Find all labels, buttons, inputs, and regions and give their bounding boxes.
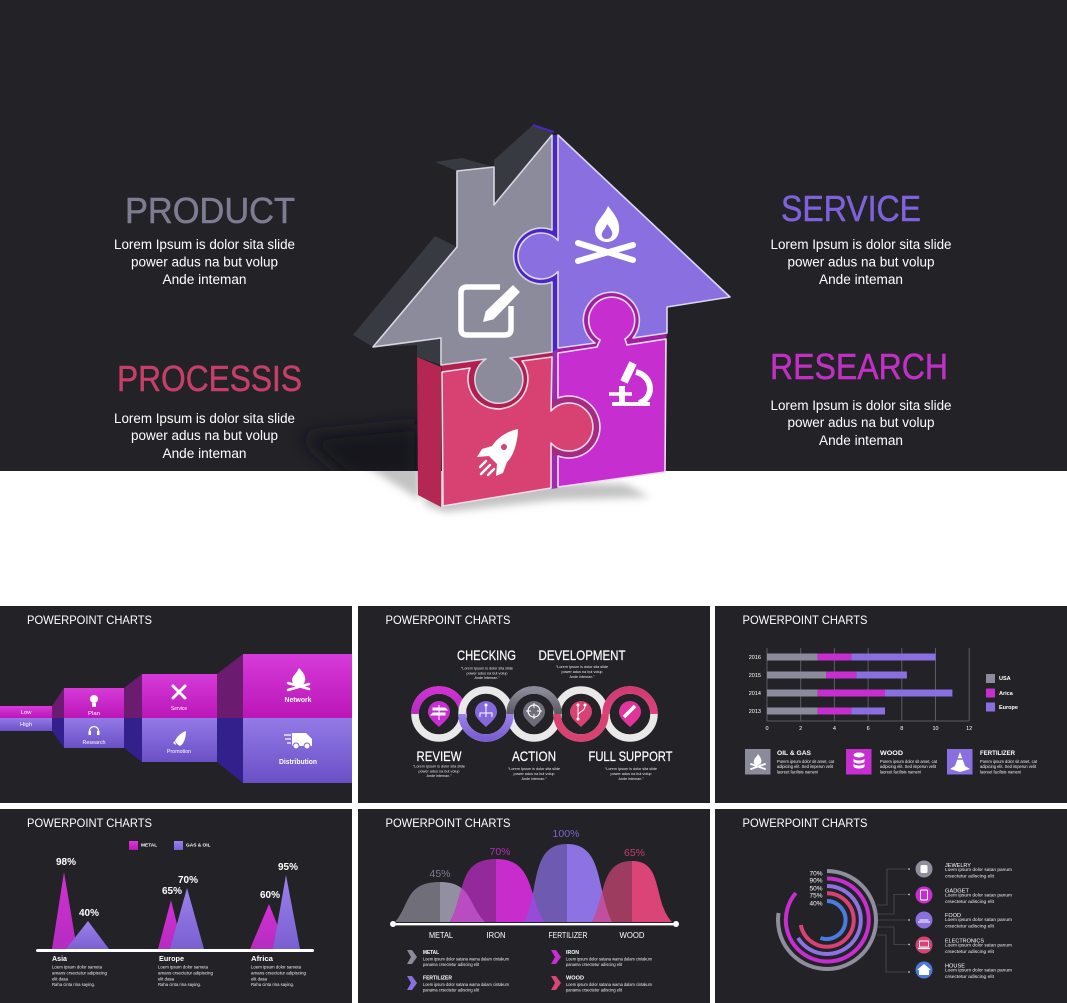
text block: processis: power adus na but volup bbox=[131, 428, 278, 443]
step: service / promotion: Service bbox=[171, 706, 187, 712]
legend: wood bbox=[551, 976, 652, 992]
text block: service: Lorem Ipsum is dolor sita slide bbox=[770, 237, 952, 252]
item: jewelry: crsectetur adiscing elit bbox=[945, 874, 995, 878]
axis line bbox=[390, 921, 679, 927]
chart axis labels: 4 bbox=[833, 726, 836, 732]
pin icon: checking bbox=[475, 701, 497, 727]
text block: research: Ande inteman bbox=[819, 433, 903, 448]
house puzzle bbox=[353, 125, 730, 507]
step: plan / research: Plan bbox=[88, 711, 100, 717]
chart legend: Arica bbox=[999, 691, 1014, 697]
text: africa: elit dasa bbox=[251, 976, 268, 982]
legend: iron: IRON bbox=[566, 950, 579, 956]
item: jewelry: JEWELRY bbox=[945, 863, 971, 869]
panel: stacked bar chart bbox=[715, 606, 1067, 803]
heading: research: RESEARCH bbox=[770, 346, 948, 387]
baseline bbox=[36, 949, 314, 952]
item: electronics: ELECTRONICS bbox=[945, 938, 984, 944]
puzzle piece: processis (red) bbox=[442, 357, 593, 506]
card: oil and gas bbox=[745, 749, 835, 774]
card: wood bbox=[846, 749, 938, 774]
percent labels bbox=[430, 828, 645, 880]
chart axis labels: 12 bbox=[966, 726, 972, 732]
labels below rings: Ande inteman.” bbox=[426, 774, 452, 778]
item: food bbox=[908, 912, 1013, 928]
legend: fertilizer: panama crsectetur adiscing elit bbox=[423, 988, 480, 992]
labels below rings: Ande inteman.” bbox=[618, 777, 644, 781]
ground shadow of house on white floor bbox=[367, 471, 648, 516]
text: europe: Loem ipsum dolor sameta bbox=[158, 964, 209, 970]
chart axis labels: 2 bbox=[799, 726, 802, 732]
panel: process rings bbox=[358, 606, 710, 803]
card: oil and gas: Porem ipsum dolor sit amet, cat bbox=[777, 759, 835, 764]
text block: service bbox=[770, 237, 952, 287]
chart axis labels: 2014 bbox=[749, 691, 761, 697]
labels below rings: power adus na but volup bbox=[610, 772, 652, 776]
item: electronics: Loem ipsum dolor satan panum bbox=[945, 942, 1013, 948]
chart legend: Europe bbox=[999, 705, 1018, 711]
text: asia: Asia bbox=[52, 954, 68, 963]
chart legend bbox=[986, 674, 1018, 712]
interlocked rings bbox=[415, 690, 654, 738]
labels below rings: “Lorem Ipsum is dolor sita slide bbox=[605, 767, 657, 771]
card: oil and gas: adipicing elit. Sed imperun velit bbox=[777, 764, 834, 769]
text: europe: Europe bbox=[159, 954, 184, 963]
step: network / distribution: Network bbox=[284, 697, 312, 704]
text: africa: Africa bbox=[251, 954, 274, 963]
legend: wood: Loem ipsum dolor satana wama dalam cintakum bbox=[566, 982, 652, 987]
humps bbox=[395, 844, 672, 922]
chart legend bbox=[129, 841, 211, 850]
text: asia: Loem ipsum dolor sameta bbox=[52, 964, 103, 970]
triangles: africa bbox=[250, 875, 300, 949]
text block: service: Ande inteman bbox=[819, 272, 903, 287]
labels below rings: ACTION bbox=[512, 748, 556, 764]
percent labels: 45% bbox=[430, 868, 450, 880]
legend: metal: panama crsectetur adiscing elit bbox=[423, 962, 480, 967]
percent labels: 100% bbox=[552, 828, 580, 840]
heading: product: PRODUCT bbox=[125, 190, 295, 231]
item: gadget: crsectetur adiscing elit bbox=[945, 899, 995, 904]
item: house: HOUSE bbox=[945, 964, 965, 970]
text block: processis: Ande inteman bbox=[162, 446, 246, 461]
step: service / promotion bbox=[142, 674, 217, 762]
percent labels: 50% bbox=[809, 886, 823, 892]
icon: microscope bbox=[609, 363, 650, 404]
category labels: METAL bbox=[429, 930, 453, 940]
labels above rings: power adus na but volup bbox=[466, 671, 508, 675]
panel: funnel chart bbox=[0, 606, 352, 803]
text: europe: Raha cinta rina saying. bbox=[158, 982, 201, 987]
panel title: POWERPOINT CHARTS bbox=[27, 613, 152, 627]
chart axis labels: 6 bbox=[867, 726, 870, 732]
labels above rings: CHECKING bbox=[457, 647, 516, 663]
step: low / high: High bbox=[20, 722, 32, 728]
pin icon: development bbox=[570, 701, 592, 727]
card: oil and gas: laoreet facilisis nameni bbox=[777, 770, 818, 774]
text: asia: Raha cinta rina saying. bbox=[52, 982, 95, 987]
legend: iron: panama crsectetur adiscing elit bbox=[566, 962, 623, 967]
labels below rings: “Lorem Ipsum is dolor sita slide bbox=[413, 764, 465, 768]
labels below rings: power adus na but volup bbox=[418, 770, 460, 774]
chart legend: GAS & OIL bbox=[186, 842, 211, 848]
chart axis labels: 2015 bbox=[749, 673, 761, 679]
legend: fertilizer: FERTILIZER bbox=[423, 976, 452, 982]
legend: iron bbox=[551, 950, 652, 967]
pin icon: full support bbox=[619, 701, 641, 727]
category labels: WOOD bbox=[620, 930, 644, 940]
labels below rings: Ande inteman.” bbox=[522, 777, 547, 781]
panel title: POWERPOINT CHARTS bbox=[742, 816, 868, 830]
puzzle piece: service (purple) bbox=[518, 135, 730, 348]
card: fertilizer: adipicing elit. Sed imperun velit bbox=[980, 764, 1037, 769]
item: jewelry bbox=[908, 860, 1013, 878]
labels above rings bbox=[457, 647, 626, 680]
percent labels: 95% bbox=[278, 861, 299, 873]
card: wood: WOOD bbox=[880, 750, 903, 757]
radial arcs bbox=[778, 871, 876, 969]
text block: product: Lorem Ipsum is dolor sita slide bbox=[114, 237, 295, 252]
step: plan / research bbox=[64, 688, 124, 748]
card: fertilizer bbox=[947, 749, 1038, 774]
card: fertilizer: laoreet facilisis nameni bbox=[980, 770, 1021, 774]
legend: wood: WOOD bbox=[566, 976, 584, 982]
chart axis labels bbox=[749, 655, 972, 732]
puzzle piece: research (magenta) bbox=[558, 297, 666, 487]
percent labels: 70% bbox=[490, 846, 510, 858]
text block: product: power adus na but volup bbox=[131, 254, 278, 270]
hero dark background bbox=[0, 0, 1067, 471]
card: fertilizer: FERTILIZER bbox=[980, 750, 1015, 757]
item: house: crsectetur adiscing elit bbox=[945, 974, 995, 979]
panel: radial bar chart bbox=[715, 809, 1067, 1003]
legend: fertilizer bbox=[407, 976, 509, 992]
connector shapes bbox=[52, 654, 243, 783]
percent labels: 75% bbox=[809, 892, 823, 900]
chart axis labels: 8 bbox=[900, 726, 903, 732]
text block: research: power adus na but volup bbox=[788, 415, 934, 430]
text: asia: elit dasa bbox=[52, 976, 69, 982]
text: africa bbox=[251, 954, 307, 987]
item: food: FOOD bbox=[945, 913, 961, 919]
text block: processis: Lorem Ipsum is dolor sita slide bbox=[114, 411, 295, 426]
percent labels: 40% bbox=[79, 907, 100, 919]
text: europe bbox=[158, 954, 214, 987]
percent labels: 60% bbox=[260, 889, 281, 901]
percent labels: 98% bbox=[56, 856, 77, 868]
step: service / promotion: Promotion bbox=[167, 749, 191, 755]
text block: research bbox=[770, 398, 952, 448]
percent labels: 65% bbox=[162, 885, 183, 897]
step: plan / research: Research bbox=[82, 740, 106, 746]
item: food: crsectetur adiscing elit bbox=[945, 924, 995, 928]
step: network / distribution bbox=[243, 654, 352, 783]
heading: processis: PROCESSIS bbox=[117, 358, 302, 399]
joint channels between pieces bbox=[441, 125, 667, 489]
card: wood: Porem ipsum dolor sit amet, cat bbox=[880, 759, 938, 764]
percent labels: 70% bbox=[178, 874, 199, 886]
text block: product: Ande inteman bbox=[162, 272, 246, 287]
percent labels: 65% bbox=[624, 847, 645, 859]
text block: research: Lorem Ipsum is dolor sita slide bbox=[770, 398, 952, 413]
pin icon: action bbox=[523, 701, 545, 727]
text block: processis bbox=[114, 411, 295, 461]
text: asia: amans crsectetur adipiscing bbox=[52, 970, 108, 976]
chart axis labels: 2013 bbox=[749, 709, 761, 715]
category labels: FERTILIZER bbox=[548, 930, 588, 940]
panel title: POWERPOINT CHARTS bbox=[386, 613, 510, 627]
chart legend: USA bbox=[999, 676, 1011, 682]
card: fertilizer: Porem ipsum dolor sit amet, cat bbox=[980, 759, 1038, 764]
text: africa: Raha cinta rina saying. bbox=[251, 982, 294, 987]
panel: hump area chart bbox=[358, 809, 710, 1003]
labels below rings: “Lorem Ipsum is dolor sita slide bbox=[508, 767, 560, 771]
icon: edit pencil bbox=[461, 284, 521, 335]
labels below rings: power adus na but volup bbox=[514, 772, 554, 776]
text: europe: amans crsectetur adipiscing bbox=[158, 970, 214, 976]
item: food: Loem ipsum dolor satan panum bbox=[945, 917, 1013, 922]
panel title: POWERPOINT CHARTS bbox=[386, 816, 510, 830]
chart axis labels: 0 bbox=[765, 726, 769, 732]
labels above rings: DEVELOPMENT bbox=[538, 647, 626, 663]
text block: service: power adus na but volup bbox=[788, 254, 934, 270]
pin icon: review bbox=[428, 701, 450, 727]
step: network / distribution: Distribution bbox=[279, 757, 317, 766]
stacked bars bbox=[767, 654, 952, 714]
item: gadget: Loem ipsum dolor satan panum bbox=[945, 892, 1013, 898]
text: asia bbox=[52, 954, 108, 987]
step: low / high bbox=[0, 706, 52, 731]
chart legend: METAL bbox=[141, 842, 157, 848]
text block: product bbox=[114, 237, 295, 287]
labels below rings bbox=[413, 748, 673, 781]
legend: metal bbox=[407, 950, 509, 967]
puzzle piece: product (gray) bbox=[373, 135, 552, 403]
labels above rings: Ande inteman.” bbox=[570, 675, 595, 679]
percent labels bbox=[809, 870, 823, 908]
percent labels: 90% bbox=[809, 878, 823, 884]
labels below rings: FULL SUPPORT bbox=[588, 748, 673, 764]
triangles: asia bbox=[52, 872, 109, 949]
heading: service: SERVICE bbox=[781, 188, 921, 229]
item: electronics bbox=[908, 936, 1013, 954]
item: jewelry: Loem ipsum dolor satan panum bbox=[945, 867, 1013, 872]
category labels bbox=[429, 930, 644, 940]
panel title: POWERPOINT CHARTS bbox=[27, 816, 152, 830]
card: oil and gas: OIL & GAS bbox=[777, 750, 812, 757]
percent labels bbox=[56, 856, 299, 919]
percent labels: 40% bbox=[809, 900, 823, 908]
ground shadow of house on dark background bbox=[304, 420, 418, 471]
panel title: POWERPOINT CHARTS bbox=[742, 613, 868, 627]
labels above rings: power adus na but volup bbox=[562, 670, 602, 674]
item: electronics: crsectetur adiscing elit bbox=[945, 949, 995, 954]
text: europe: elit dasa bbox=[158, 976, 175, 982]
text: africa: amans crsectetur adipiscing bbox=[251, 970, 307, 976]
text: africa: Loem ipsum dolor sameta bbox=[251, 964, 302, 970]
chart axis labels: 2016 bbox=[749, 655, 761, 661]
labels above rings: Ande inteman.” bbox=[474, 676, 500, 680]
icon: rocket bbox=[477, 429, 518, 476]
labels below rings: REVIEW bbox=[416, 748, 462, 764]
item: house bbox=[908, 962, 1013, 979]
legend: wood: panama crsectetur adiscing elit bbox=[566, 988, 623, 992]
labels above rings: “Lorem Ipsum is dolor sita slide bbox=[461, 666, 513, 670]
item: house: Loem ipsum dolor satan panum bbox=[945, 968, 1013, 972]
category labels: IRON bbox=[486, 930, 506, 940]
step: low / high: Low bbox=[20, 710, 32, 716]
card: wood: adipicing elit. Sed imperun velit bbox=[880, 764, 937, 769]
triangles: europe bbox=[158, 888, 204, 949]
chart axis labels: 10 bbox=[932, 726, 939, 732]
connector lines bbox=[877, 869, 907, 972]
card: wood: laoreet facilisis nameni bbox=[880, 770, 921, 774]
icon: campfire bbox=[578, 206, 633, 261]
legend: metal: Loem ipsum dolor satana wama dalam cintakum bbox=[423, 956, 509, 962]
item: gadget: GADGET bbox=[945, 888, 970, 894]
labels above rings: “Lorem Ipsum is dolor sita slide bbox=[556, 665, 608, 669]
house extruded dark side bbox=[353, 125, 553, 365]
percent labels: 70% bbox=[809, 870, 823, 878]
panel: triangle chart bbox=[0, 809, 352, 1003]
item: gadget bbox=[908, 886, 1013, 904]
legend: fertilizer: Loem ipsum dolor satana wama dalam cintakum bbox=[423, 982, 509, 987]
legend: iron: Loem ipsum dolor satana wama dalam cintakum bbox=[566, 956, 652, 962]
red piece side wall bbox=[417, 357, 441, 507]
legend: metal: METAL bbox=[423, 950, 439, 956]
